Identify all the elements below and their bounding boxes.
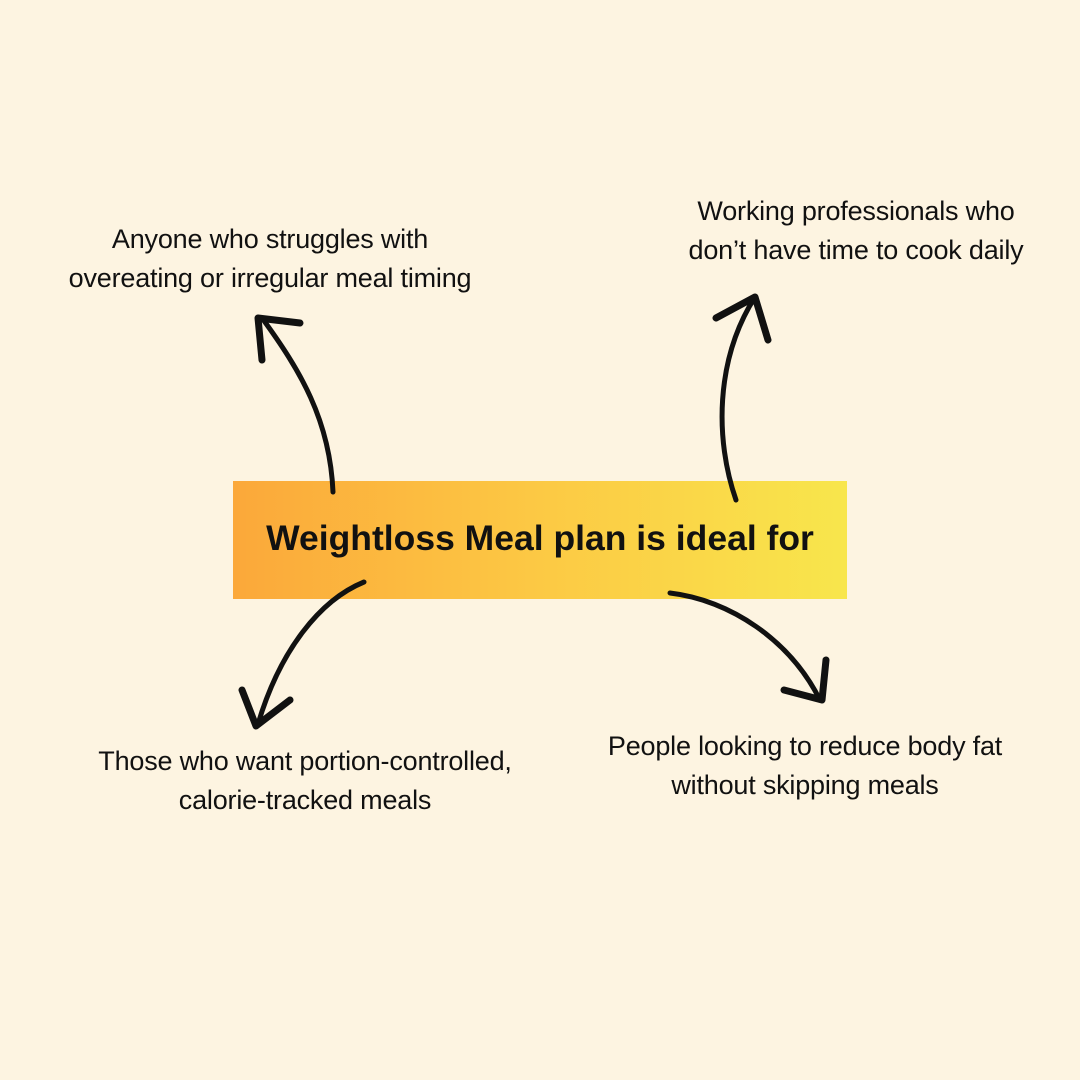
arrow: top-right (716, 297, 768, 500)
text: top-left (69, 224, 471, 293)
text: bottom-left: Those who want portion-controlled, (98, 746, 512, 776)
arrow: top-left (258, 318, 333, 492)
text: top-left: Anyone who struggles with (112, 224, 428, 254)
text: bottom-left (98, 746, 512, 815)
text: bottom-right (608, 731, 1002, 800)
arrow: bottom-left (242, 582, 364, 726)
text: bottom-left: calorie-tracked meals (179, 785, 431, 815)
text: top-right: don’t have time to cook daily (689, 235, 1023, 265)
banner: title (233, 481, 847, 599)
text: top-right (689, 196, 1024, 265)
text: bottom-right: without skipping meals (671, 770, 939, 800)
title: Weightloss Meal plan is ideal for (266, 518, 814, 558)
text: top-left: overeating or irregular meal timing (69, 263, 471, 293)
arrow: bottom-right (670, 593, 826, 700)
text: top-right: Working professionals who (697, 196, 1015, 226)
text: bottom-right: People looking to reduce body fat (608, 731, 1002, 761)
